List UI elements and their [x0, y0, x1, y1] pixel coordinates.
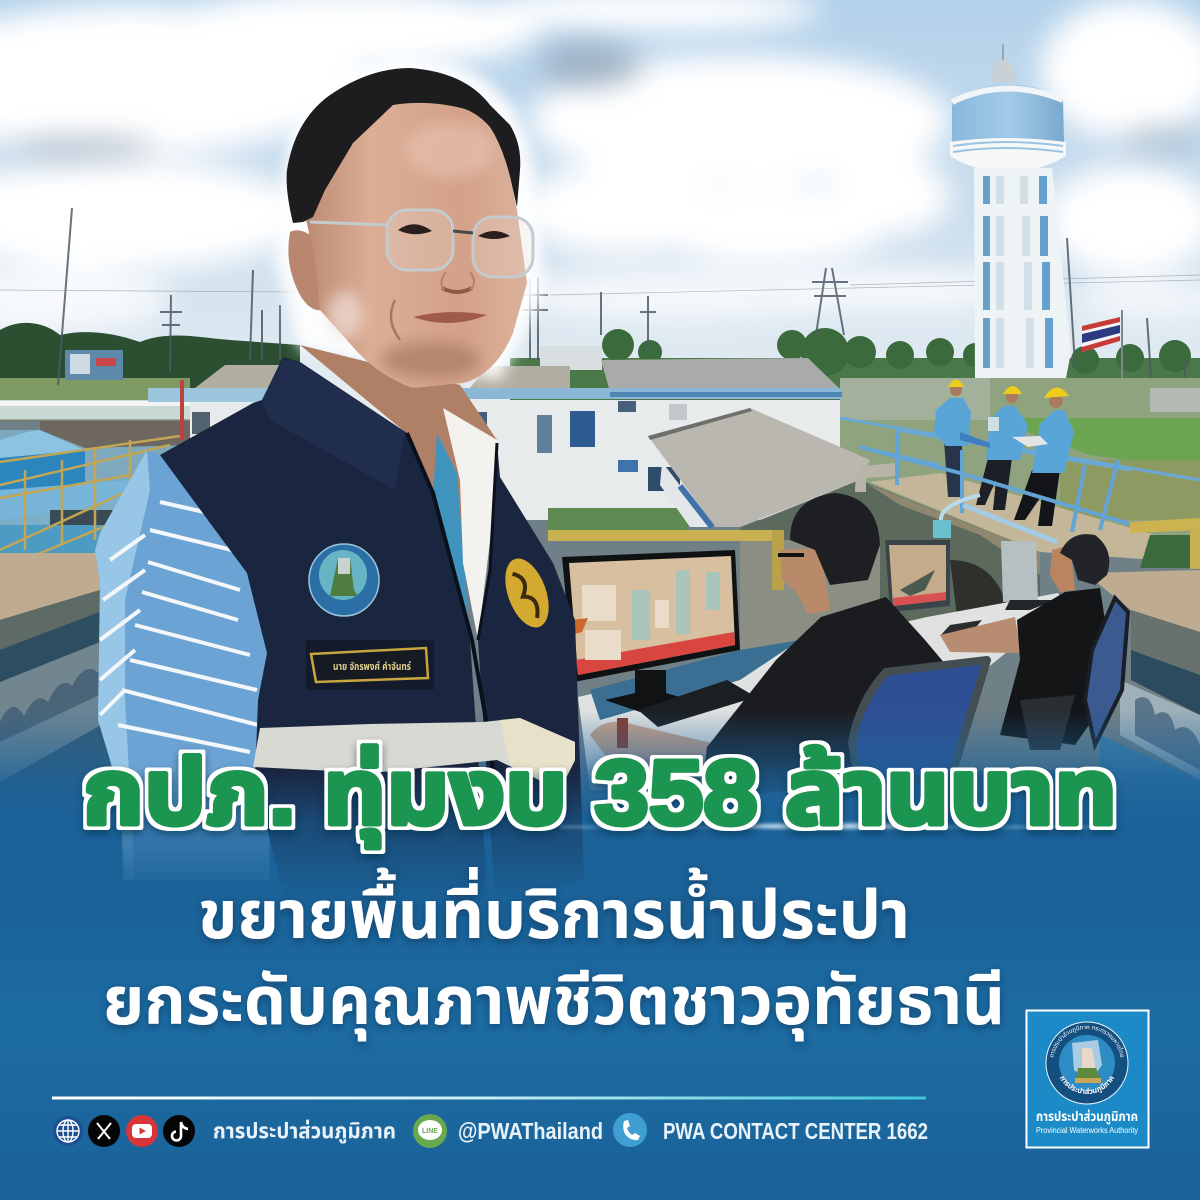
main control monitor: [562, 550, 756, 727]
background: horizon trees, billboard and pylons: [0, 208, 1200, 431]
lower pitched roof: [648, 408, 870, 527]
water tower: [950, 44, 1123, 380]
left plant: tank, platforms and yellow railings: [0, 421, 190, 570]
back monitor: [885, 540, 950, 612]
logo Thai name: การประปาส่วนภูมิภาค: [1036, 1109, 1138, 1125]
logo seal: [1046, 1022, 1128, 1104]
footer: icon LINE: [413, 1114, 447, 1148]
logo seal: การประปาส่วนภูมิภาค: [1060, 1076, 1114, 1094]
gold emblem: [497, 553, 557, 633]
footer: LINE handle: @PWAThailand: [458, 1118, 603, 1144]
rear operator: [940, 534, 1128, 750]
back railing: [840, 418, 1200, 480]
canal and concrete walkway: [740, 463, 1172, 660]
portrait: man in navy vest: [95, 55, 584, 900]
underpainting of plant area: [0, 420, 1200, 820]
flag: [1082, 310, 1123, 380]
name tag: นาย จักรพงศ์ คำจันทร์: [333, 661, 411, 673]
engineer 1: [934, 380, 971, 497]
footer: organisation name: การประปาส่วนภูมิภาค: [213, 1120, 396, 1144]
name tag: [306, 640, 434, 690]
logo seal: การประปาส่วนภูมิภาค กระทรวงมหาดไทย: [1050, 1026, 1124, 1058]
PWA logo panel: [1026, 1010, 1150, 1148]
face: [305, 100, 527, 388]
concrete tank walls: [0, 553, 1200, 820]
subheadline line 1: ขยายพื้นที่บริการน้ำประปา: [198, 867, 910, 953]
striped shirt sleeve: [95, 450, 270, 880]
glasses: [310, 210, 533, 277]
footer: icon globe: [53, 1116, 83, 1146]
footer: icon X: [88, 1115, 120, 1147]
treatment building: [148, 358, 870, 532]
yellow pipe rail: [548, 518, 1200, 590]
navy vest: [160, 357, 584, 900]
main headline: กปภ. ทุ่มงบ 358 ล้านบาท: [83, 742, 1117, 848]
front operator: [590, 493, 987, 800]
fade of plant scene into blue: [0, 710, 1200, 910]
head: [287, 68, 533, 388]
bottom blue gradient panel: [0, 770, 1200, 1200]
walkway railing: [860, 430, 1140, 542]
desks and second row of monitors: [578, 540, 1065, 790]
rear chair: [1085, 598, 1128, 745]
hair: [287, 68, 520, 223]
front chair: [852, 660, 987, 790]
engineers on walkway: [934, 380, 1074, 526]
engineer 2: [976, 386, 1028, 510]
background: far right field: [840, 378, 1200, 538]
engineer 3: [1012, 387, 1074, 526]
neck: [300, 345, 497, 560]
reflective stripe: [253, 718, 575, 790]
logo English name: Provincial Waterworks Authority: [1036, 1126, 1138, 1135]
white halo behind head: [275, 55, 545, 380]
rear monitor: [1001, 541, 1056, 610]
footer: icon YouTube: [126, 1115, 158, 1147]
footer divider: [52, 1096, 926, 1100]
footer: contact centre: PWA CONTACT CENTER 1662: [663, 1118, 928, 1144]
ear: [288, 230, 322, 310]
footer: icon TikTok: [163, 1115, 195, 1147]
round PWA patch: [309, 544, 379, 616]
footer: icon phone: [613, 1113, 647, 1147]
keyboard: [638, 680, 756, 727]
background: sky with clouds: [0, 0, 1200, 420]
subheadline line 2: ยกระดับคุณภาพชีวิตชาวอุทัยธานี: [103, 963, 1005, 1042]
footer: icon LINE: LINE: [422, 1128, 438, 1135]
shirt placket and collar: [433, 408, 497, 640]
